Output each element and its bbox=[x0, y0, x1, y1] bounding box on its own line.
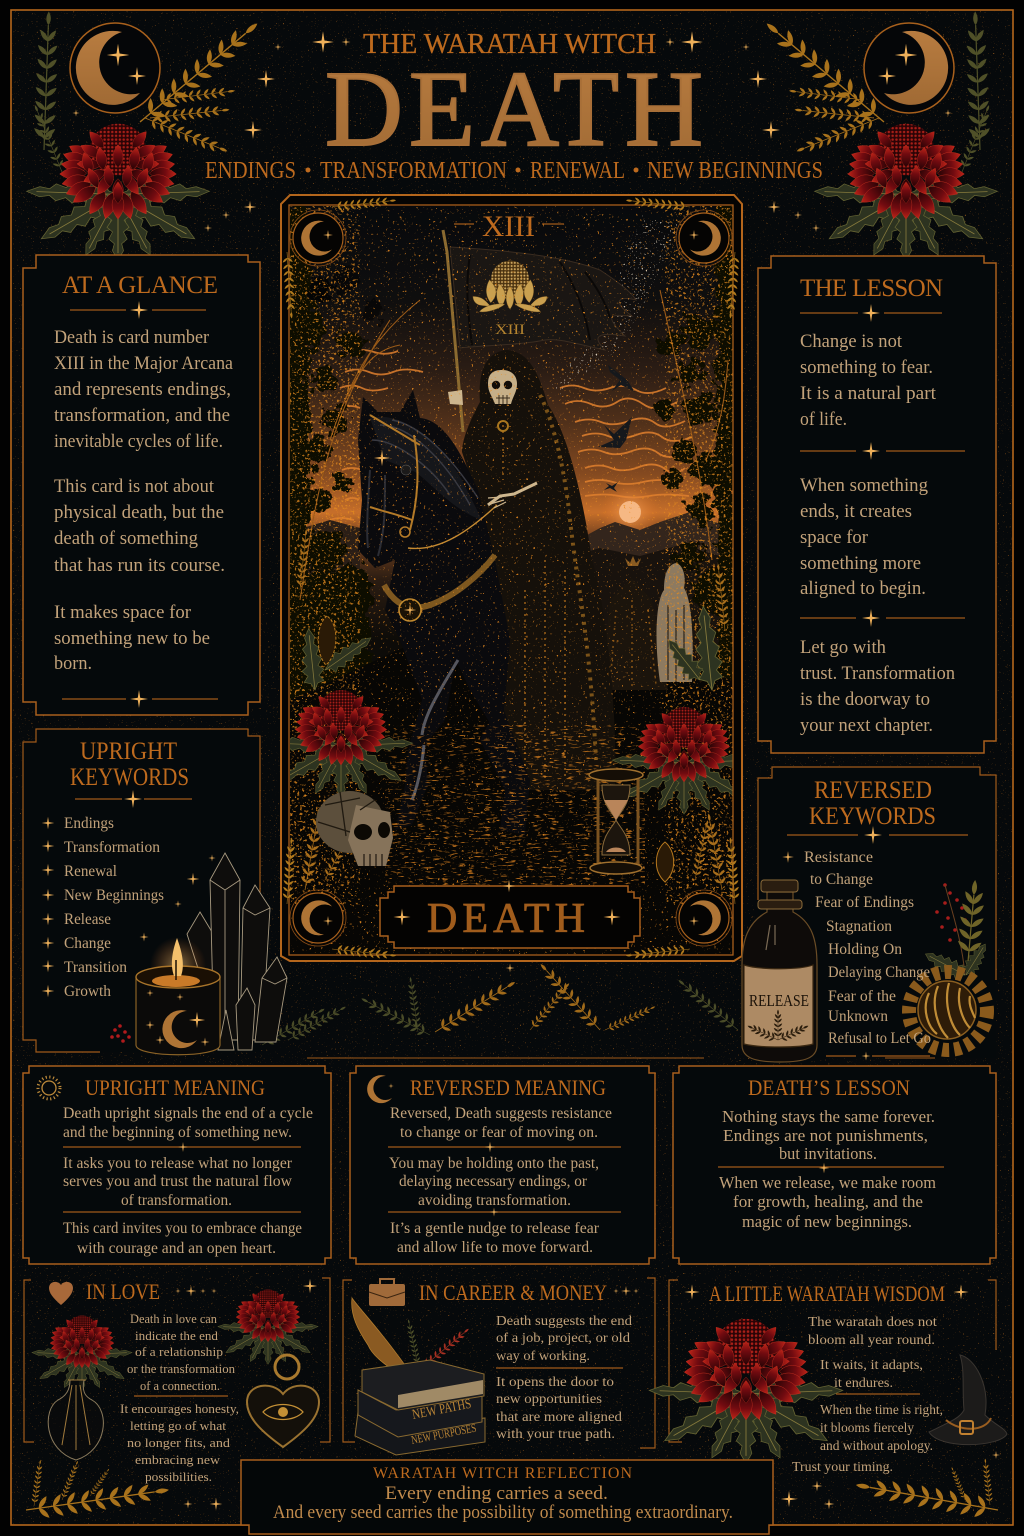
book 2 bbox=[358, 1390, 482, 1437]
numeral XIII bbox=[454, 210, 564, 243]
body text: with your true path. bbox=[496, 1426, 615, 1441]
banksia head bbox=[918, 981, 976, 1039]
plaque name: DEATH bbox=[427, 896, 585, 942]
bottom sprig left bbox=[24, 1459, 222, 1522]
body text: bloom all year round. bbox=[808, 1332, 935, 1347]
body text: avoiding transformation. bbox=[418, 1192, 571, 1209]
panel: death's lesson bbox=[673, 1066, 996, 1264]
body text: and without apology. bbox=[820, 1438, 933, 1453]
body text: Reversed, Death suggests resistance bbox=[390, 1105, 612, 1122]
waratah and heart locket bbox=[218, 1290, 319, 1447]
heading: UPRIGHT MEANING bbox=[85, 1075, 265, 1100]
body text: of life. bbox=[800, 409, 847, 430]
gold sprigs and ferns bbox=[295, 529, 731, 891]
keyword list: to Change bbox=[810, 871, 873, 888]
dividers bbox=[388, 1142, 621, 1216]
body text: that has run its course. bbox=[54, 555, 225, 576]
body text: for growth, healing, and the bbox=[733, 1192, 923, 1211]
body text: it blooms fiercely bbox=[820, 1420, 914, 1435]
body text: born. bbox=[54, 653, 92, 674]
body text: death of something bbox=[54, 528, 198, 549]
panel: the lesson bbox=[758, 256, 996, 753]
body text: delaying necessary endings, or bbox=[399, 1173, 588, 1190]
reaper details bbox=[448, 370, 596, 780]
body text: of a job, project, or old bbox=[496, 1330, 630, 1345]
divider bbox=[496, 1367, 623, 1369]
keyword list: Fear of Endings bbox=[815, 894, 914, 911]
header ornament: right moon and waratah bbox=[742, 11, 998, 260]
body text: something new to be bbox=[54, 628, 210, 649]
body text: but invitations. bbox=[779, 1144, 877, 1163]
body text: magic of new beginnings. bbox=[742, 1212, 912, 1231]
subtitle keywords: NEW BEGINNINGS bbox=[647, 158, 823, 184]
body text: of a relationship bbox=[135, 1345, 223, 1359]
title sparkles bbox=[312, 31, 703, 53]
divider bbox=[836, 1393, 920, 1395]
candle bbox=[136, 937, 220, 1055]
body text: Trust your timing. bbox=[792, 1459, 893, 1474]
panel: a little waratah wisdom bbox=[649, 1280, 1007, 1474]
keyword list: Refusal to Let Go bbox=[828, 1030, 931, 1047]
keyword list: Growth bbox=[64, 983, 111, 1000]
body text: XIII in the Major Arcana bbox=[54, 353, 234, 374]
keyword list: Delaying Change bbox=[828, 964, 930, 981]
flame bbox=[172, 938, 183, 976]
corner moon: top left bbox=[281, 195, 397, 319]
body text: It’s a gentle nudge to release fear bbox=[390, 1220, 600, 1237]
keyword list bbox=[804, 849, 931, 1047]
birds bbox=[598, 365, 635, 492]
heading sparkles bbox=[684, 1284, 969, 1300]
body text: transformation, and the bbox=[54, 405, 230, 426]
bottle label bbox=[744, 965, 813, 1047]
heading: THE LESSON bbox=[800, 275, 943, 302]
body text: and the beginning of something new. bbox=[63, 1124, 292, 1141]
header bbox=[205, 28, 823, 184]
witch hat bbox=[929, 1355, 1007, 1445]
body text: something more bbox=[800, 553, 921, 574]
sun bbox=[607, 486, 653, 530]
body text: your next chapter. bbox=[800, 715, 933, 736]
hills bbox=[588, 512, 720, 556]
reins bbox=[408, 505, 497, 548]
heading: KEYWORDS bbox=[809, 803, 936, 830]
subtitle keywords: RENEWAL bbox=[530, 158, 625, 184]
ground specks bbox=[385, 725, 645, 885]
feather bbox=[352, 1298, 426, 1396]
skull bbox=[316, 791, 393, 866]
heading: UPRIGHT bbox=[80, 738, 177, 765]
right trees bbox=[654, 206, 738, 706]
heading: AT A GLANCE bbox=[62, 272, 218, 299]
heading: DEATH’S LESSON bbox=[748, 1075, 910, 1100]
bridle bbox=[370, 415, 420, 530]
panel: at a glance bbox=[23, 255, 260, 715]
body text bbox=[792, 1314, 943, 1474]
heading bbox=[70, 738, 189, 791]
body text bbox=[496, 1313, 632, 1441]
botanical border below card bbox=[285, 959, 935, 1058]
body text: It is a natural part bbox=[800, 383, 937, 404]
bottom flourish bbox=[826, 1052, 930, 1060]
heading bbox=[809, 777, 936, 830]
horse rear leg bbox=[480, 700, 530, 835]
body text: Endings are not punishments, bbox=[723, 1126, 928, 1145]
body text: space for bbox=[800, 527, 869, 548]
breast collar bbox=[384, 555, 495, 608]
banner heading: WARATAH WITCH REFLECTION bbox=[373, 1465, 632, 1482]
body text: trust. Transformation bbox=[800, 663, 955, 684]
body text: When the time is right, bbox=[820, 1402, 943, 1417]
plaque sparkles bbox=[393, 880, 621, 926]
banksia and berries bbox=[909, 879, 992, 1050]
body text: of a connection. bbox=[140, 1379, 220, 1393]
body text: You may be holding onto the past, bbox=[389, 1155, 599, 1172]
body text: It opens the door to bbox=[496, 1374, 614, 1389]
icon: briefcase bbox=[369, 1279, 405, 1306]
book spine text: NEW PATHS bbox=[411, 1397, 473, 1423]
label text: RELEASE bbox=[749, 991, 809, 1010]
dividers bbox=[63, 1142, 301, 1212]
body text: that are more aligned bbox=[496, 1409, 622, 1424]
waratah bbox=[649, 1319, 843, 1463]
keyword list: Fear of the bbox=[828, 988, 896, 1005]
body text: Change is not bbox=[800, 331, 903, 352]
candle moon bbox=[162, 1010, 197, 1048]
heading: REVERSED MEANING bbox=[410, 1075, 606, 1100]
subtitle keywords: ENDINGS bbox=[205, 158, 296, 184]
corner moon: bottom left bbox=[281, 837, 397, 961]
body text: possibilities. bbox=[145, 1470, 212, 1484]
subtitle keywords bbox=[205, 158, 823, 184]
keyword list: Renewal bbox=[64, 863, 118, 880]
red berries bbox=[110, 1024, 131, 1043]
divider bbox=[134, 1395, 228, 1397]
body text: new opportunities bbox=[496, 1391, 602, 1406]
heading: IN LOVE bbox=[86, 1279, 160, 1304]
body text: When something bbox=[800, 475, 928, 496]
keyword list: Stagnation bbox=[826, 918, 892, 935]
body text: Let go with bbox=[800, 637, 886, 658]
body text bbox=[719, 1107, 936, 1231]
banner waratah bbox=[473, 261, 547, 312]
body text: to change or fear of moving on. bbox=[400, 1124, 598, 1141]
panel: in career and money bbox=[343, 1278, 655, 1455]
book spine text: NEW PURPOSES bbox=[410, 1421, 477, 1447]
inner card frame bbox=[289, 205, 733, 955]
icon: heart bbox=[49, 1282, 73, 1305]
body text: Death upright signals the end of a cycle bbox=[63, 1105, 313, 1122]
body text: indicate the end bbox=[135, 1329, 219, 1343]
body text: ends, it creates bbox=[800, 501, 912, 522]
body text: This card is not about bbox=[54, 476, 215, 497]
heading sparkles bbox=[175, 1279, 317, 1296]
panel: upright meaning bbox=[23, 1066, 331, 1264]
body text: it endures. bbox=[834, 1375, 893, 1390]
mane bbox=[370, 417, 482, 520]
body text: This card invites you to embrace change bbox=[63, 1220, 302, 1237]
candle body bbox=[136, 977, 220, 1055]
divider bbox=[787, 826, 968, 844]
keyword bullets bbox=[42, 817, 54, 997]
ground bbox=[612, 670, 722, 700]
divider bbox=[70, 301, 206, 319]
main title: death: DEATH bbox=[325, 50, 703, 169]
body text: The waratah does not bbox=[808, 1314, 937, 1329]
hands bbox=[448, 390, 463, 405]
banner bbox=[450, 247, 636, 350]
flag bbox=[443, 230, 636, 432]
body text bbox=[54, 327, 234, 674]
body text bbox=[800, 331, 955, 736]
keyword list: Release bbox=[64, 911, 111, 928]
bullet bbox=[782, 851, 794, 863]
icon: sun bbox=[38, 1077, 60, 1099]
keyword list: Transition bbox=[64, 959, 127, 976]
banner line 1: Every ending carries a seed. bbox=[385, 1483, 608, 1504]
icon: banner moon bbox=[771, 1486, 797, 1516]
horse bbox=[358, 390, 530, 835]
heading: KEYWORDS bbox=[70, 764, 189, 791]
keyword list: Resistance bbox=[804, 849, 873, 866]
banksia petals bbox=[909, 972, 987, 1050]
milky way bbox=[552, 216, 677, 394]
keyword list: Endings bbox=[64, 815, 114, 832]
heading: IN CAREER & MONEY bbox=[419, 1280, 607, 1305]
body text: Death in love can bbox=[130, 1312, 218, 1326]
clouds bbox=[330, 350, 692, 520]
reflection banner bbox=[241, 1460, 773, 1534]
keyword list: New Beginnings bbox=[64, 887, 164, 904]
body text: When we release, we make room bbox=[719, 1173, 936, 1192]
keyword list: Unknown bbox=[828, 1008, 888, 1025]
skull bbox=[488, 370, 517, 404]
leg highlight bbox=[412, 660, 458, 800]
label sprig bbox=[745, 1010, 811, 1045]
body text: It asks you to release what no longer bbox=[63, 1155, 293, 1172]
book 3 bbox=[355, 1412, 485, 1455]
panel: reversed keywords bbox=[758, 767, 996, 1060]
reaper cloak bbox=[462, 350, 615, 790]
body text: and allow life to move forward. bbox=[397, 1239, 593, 1256]
book 1 bbox=[362, 1360, 484, 1410]
left trees bbox=[290, 206, 385, 640]
body text: letting go of what bbox=[130, 1419, 227, 1433]
keyword list: Holding On bbox=[828, 941, 902, 958]
bottle bbox=[742, 880, 817, 1062]
name plaque bbox=[380, 880, 640, 948]
body text: It waits, it adapts, bbox=[820, 1357, 923, 1372]
keyword list bbox=[64, 815, 164, 1000]
body text: something to fear. bbox=[800, 357, 933, 378]
keyword sparkles bbox=[140, 854, 216, 942]
background figures bbox=[600, 556, 693, 690]
red waratah right bbox=[612, 707, 732, 814]
corner moon: bottom right bbox=[625, 837, 741, 961]
card specks bbox=[290, 205, 733, 955]
body text: physical death, but the bbox=[54, 502, 224, 523]
hourglass bbox=[589, 769, 643, 874]
body text: serves you and trust the natural flow bbox=[63, 1173, 292, 1190]
banner numeral: XIII bbox=[495, 322, 525, 338]
card scene bbox=[269, 205, 756, 955]
keyword list: Change bbox=[64, 935, 111, 952]
red waratah left bbox=[290, 690, 414, 794]
header ornament: left moon and waratah bbox=[26, 11, 282, 260]
body text: and represents endings, bbox=[54, 379, 231, 400]
keyword list: Transformation bbox=[64, 839, 160, 856]
body text: of transformation. bbox=[121, 1192, 232, 1209]
icon: crescent bbox=[367, 1075, 394, 1103]
panel: tarot card bbox=[269, 195, 756, 961]
body text: embracing new bbox=[135, 1453, 220, 1467]
berry sprig bbox=[935, 883, 967, 942]
body text: It encourages honesty, bbox=[120, 1402, 239, 1416]
body text: inevitable cycles of life. bbox=[54, 431, 223, 452]
dividers bbox=[800, 304, 965, 627]
face highlight bbox=[367, 470, 385, 556]
panel: reversed meaning bbox=[350, 1066, 655, 1264]
numeral XIII: XIII bbox=[482, 210, 535, 243]
body text bbox=[120, 1312, 239, 1484]
heading: A LITTLE WARATAH WISDOM bbox=[709, 1281, 945, 1306]
divider bbox=[75, 790, 192, 808]
books and quill bbox=[352, 1298, 485, 1455]
bottom divider bbox=[62, 690, 218, 708]
panel: in love bbox=[24, 1278, 330, 1484]
body text bbox=[389, 1105, 612, 1256]
heading: REVERSED bbox=[814, 777, 932, 804]
title: the waratah witch: THE WARATAH WITCH bbox=[363, 28, 656, 60]
divider bbox=[718, 1163, 944, 1173]
body text: or the transformation bbox=[127, 1362, 236, 1376]
banner line 2: And every seed carries the possibility of something extraordinary. bbox=[273, 1502, 733, 1523]
body text: with courage and an open heart. bbox=[77, 1240, 276, 1257]
body text: is the doorway to bbox=[800, 689, 930, 710]
body text: It makes space for bbox=[54, 602, 192, 623]
banksia cones bbox=[318, 616, 674, 882]
body text bbox=[63, 1105, 313, 1257]
panel: upright keywords bbox=[23, 729, 260, 1052]
corner moon: top right bbox=[625, 195, 741, 319]
crystals bbox=[187, 853, 328, 1050]
subtitle keywords: TRANSFORMATION bbox=[320, 158, 507, 184]
body text: Nothing stays the same forever. bbox=[722, 1107, 935, 1126]
bottom sprig right bbox=[812, 1451, 1000, 1522]
waratah in vase bbox=[32, 1316, 132, 1460]
body text: way of working. bbox=[496, 1348, 590, 1363]
body text: Death suggests the end bbox=[496, 1313, 632, 1328]
pole bbox=[443, 230, 463, 432]
side column specks bbox=[290, 205, 733, 905]
body text: no longer fits, and bbox=[127, 1436, 231, 1450]
heading sparkles bbox=[613, 1286, 639, 1296]
body text: Death is card number bbox=[54, 327, 210, 348]
branches bbox=[300, 290, 728, 600]
body text: aligned to begin. bbox=[800, 578, 926, 599]
